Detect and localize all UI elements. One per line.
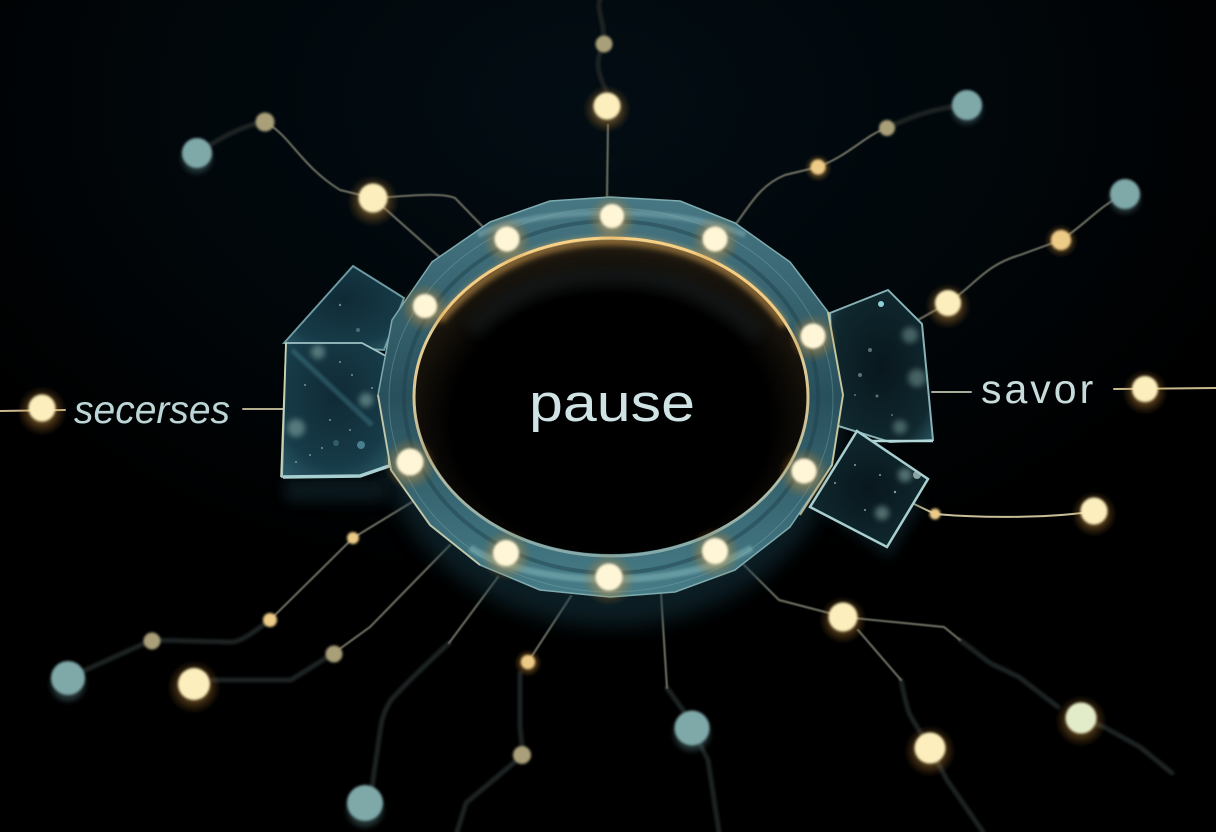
band highlights [389, 208, 833, 592]
outer band [378, 197, 843, 597]
teal network nodes [51, 90, 1140, 827]
glass panel: left [281, 343, 389, 477]
cream outer edge, lower left and right [378, 395, 480, 565]
ring [378, 197, 843, 597]
reflection below panels [285, 478, 925, 560]
glass panel: lower right [810, 431, 928, 547]
hollow [414, 240, 808, 554]
glass panel: right [830, 290, 933, 442]
label: secerses: secerses [74, 389, 230, 432]
inner reflection [470, 276, 760, 335]
label lines [0, 388, 1216, 517]
network lines [265, 122, 1125, 688]
warm inner edge [414, 238, 808, 556]
label: savor: savor [981, 366, 1096, 412]
center label: pause: pause [529, 374, 695, 433]
ring lights [383, 194, 838, 606]
glass panel: upper left [284, 266, 404, 350]
reflection below ring [380, 230, 840, 626]
pale node [1066, 702, 1096, 734]
